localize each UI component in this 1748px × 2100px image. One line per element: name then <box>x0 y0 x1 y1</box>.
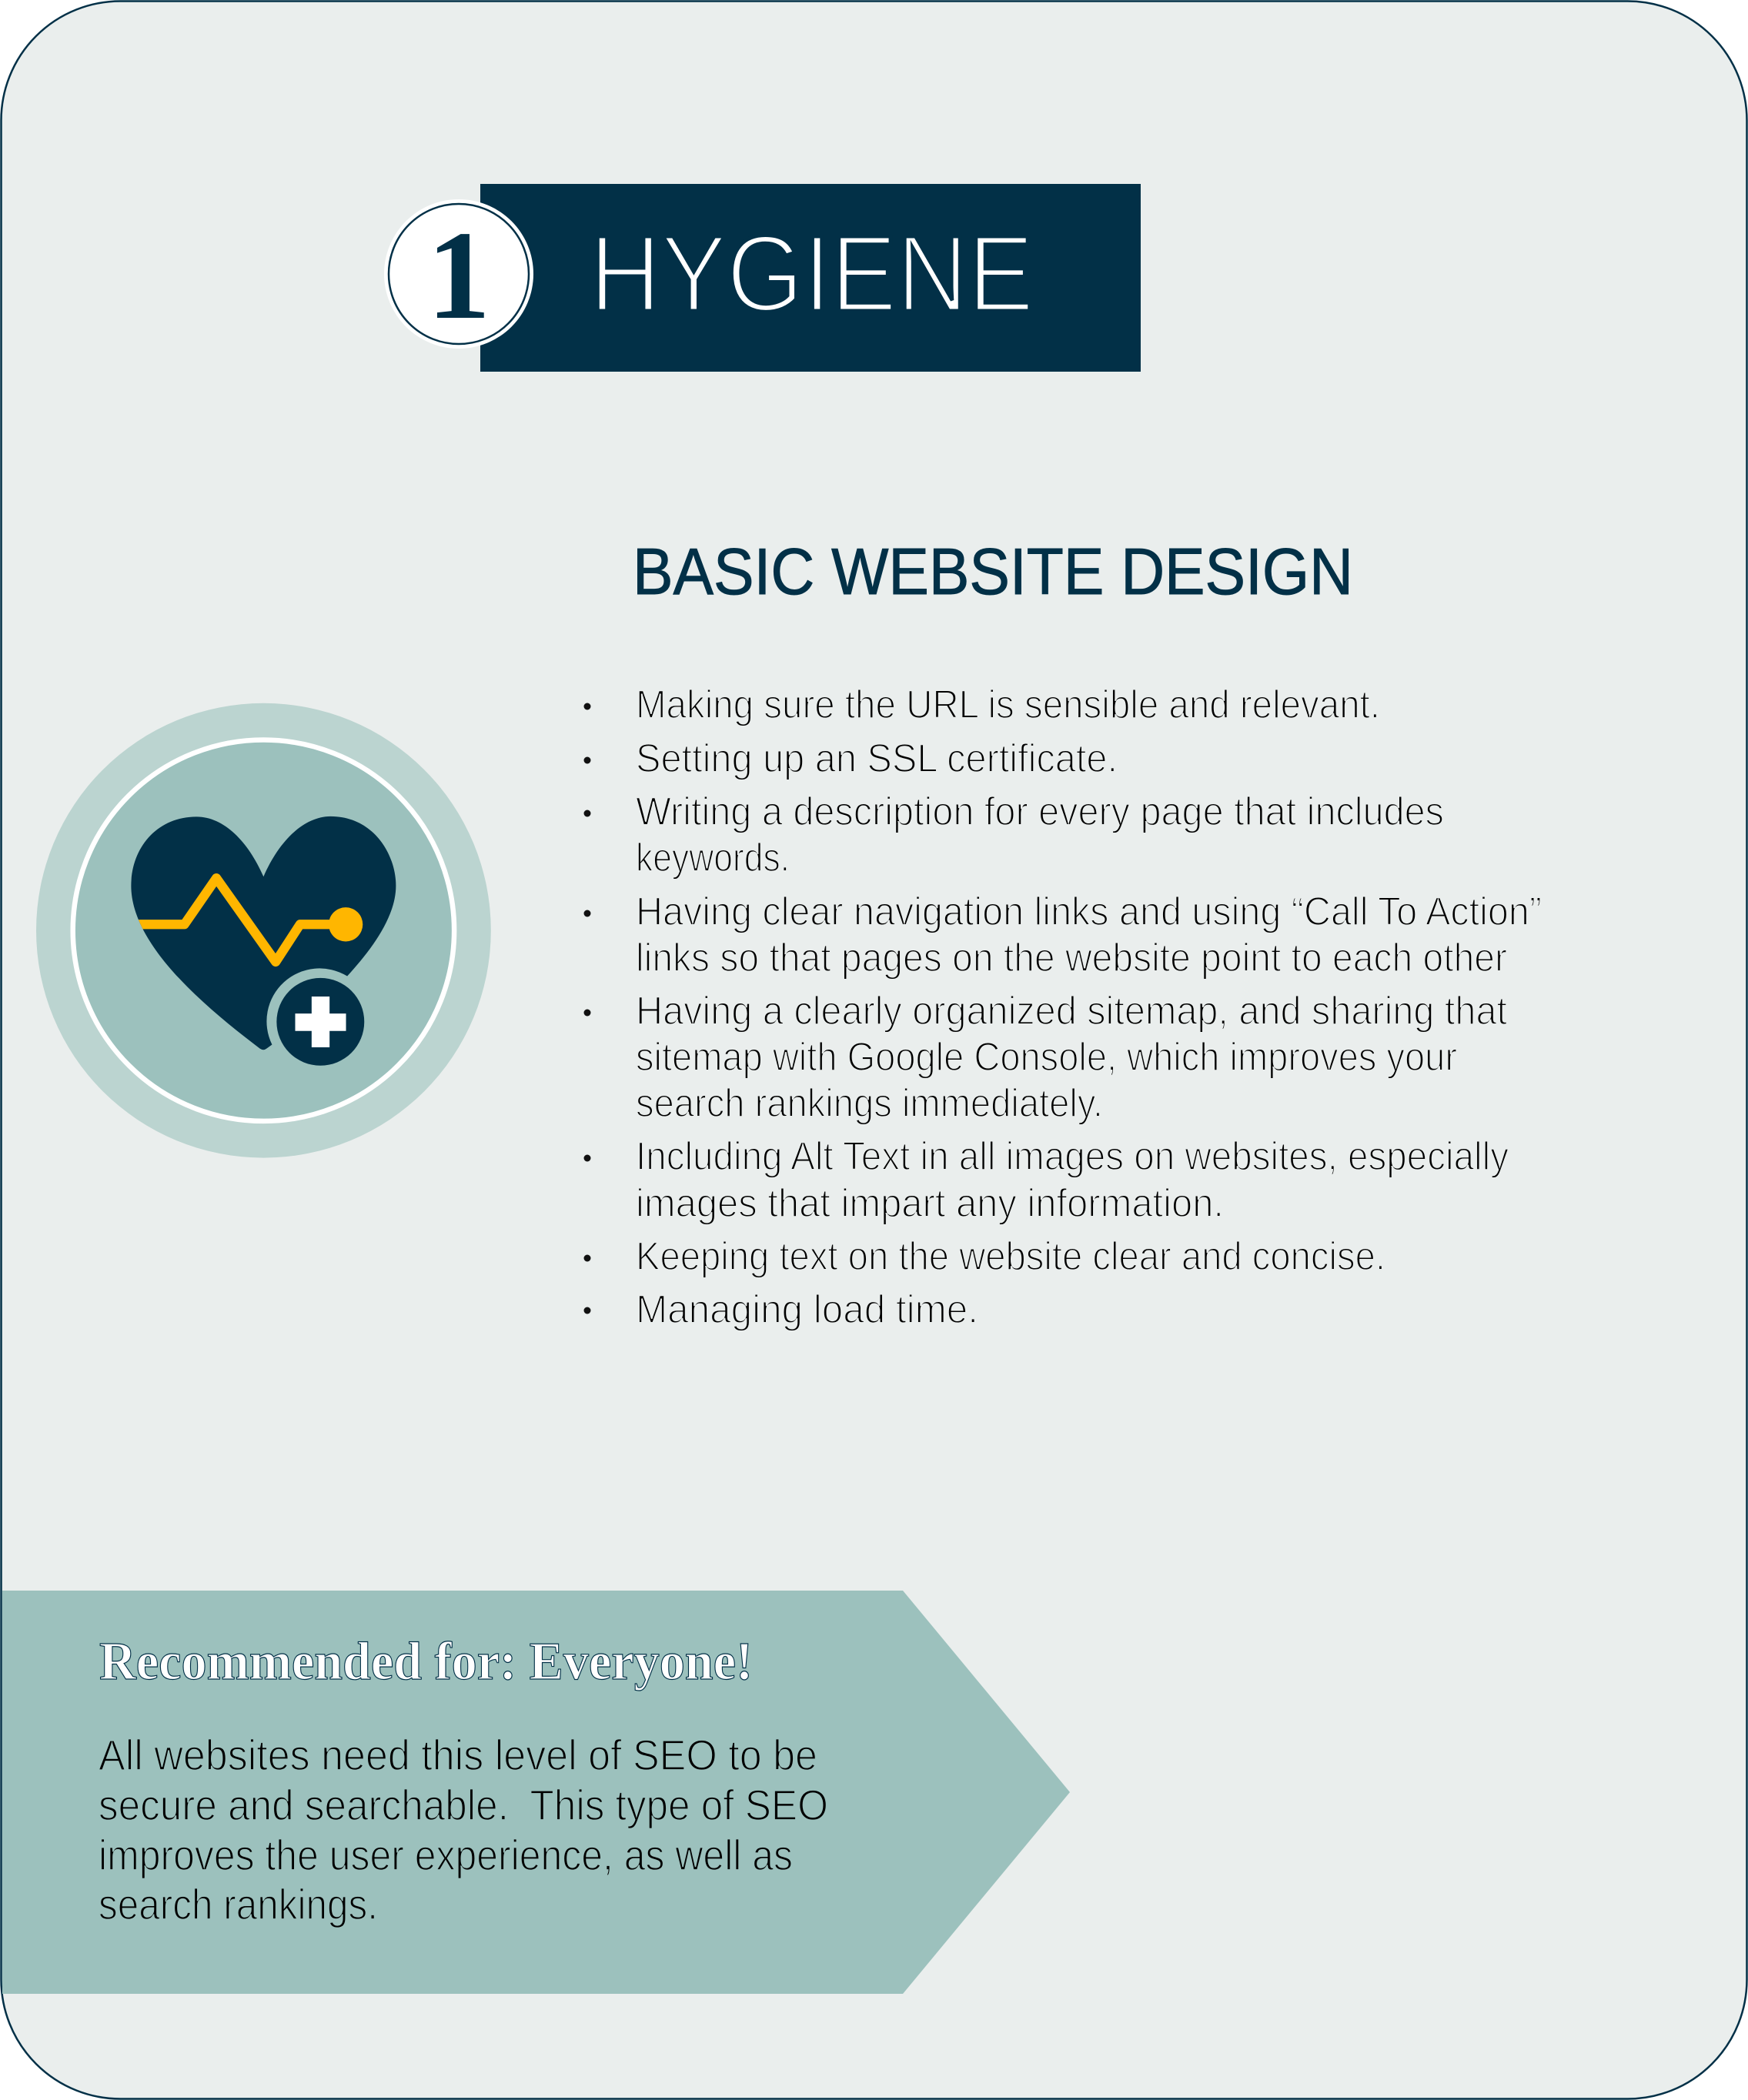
bullet: description: keywords. <box>636 836 790 880</box>
title bar <box>480 184 1141 372</box>
callout arrow: recommended for <box>2 1591 1070 1994</box>
callout heading: Recommended for: Everyone! <box>99 1632 753 1691</box>
callout text: secure and searchable. This type of SEO <box>99 1781 828 1829</box>
bullet: sitemap <box>583 989 1508 1126</box>
section header: number and title <box>384 184 1141 372</box>
callout text: improves the user experience, as well as <box>99 1831 793 1879</box>
bullet: load time: Managing load time. <box>636 1287 978 1332</box>
bullet: navigation <box>583 890 1542 980</box>
bullet: sitemap: sitemap with Google Console, which improves your <box>636 1035 1457 1080</box>
bullet: alt text: images that impart any information. <box>636 1181 1224 1226</box>
icon: heart with pulse and plus <box>36 703 491 1158</box>
callout text: All websites need this level of SEO to be <box>99 1731 817 1779</box>
bullet: description <box>583 790 1444 880</box>
callout text <box>99 1731 828 1928</box>
heading: basic website design: BASIC WEBSITE DESIGN <box>633 536 1353 609</box>
bullet: URL: Making sure the URL is sensible and relevant. <box>636 683 1380 727</box>
bullet: description: Writing a description for every page that includes <box>636 790 1444 834</box>
bullet: alt text: Including Alt Text in all images on websites, especially <box>636 1134 1509 1179</box>
number badge: 1 <box>427 205 490 346</box>
bullet: SSL: Setting up an SSL certificate. <box>636 736 1118 781</box>
title text: HYGIENE <box>590 212 1034 334</box>
bullet: sitemap: Having a clearly organized sitemap, and sharing that <box>636 989 1508 1033</box>
bullet: sitemap: search rankings immediately. <box>636 1081 1103 1126</box>
bullet: navigation: links so that pages on the website point to each other <box>636 936 1507 980</box>
number badge <box>384 199 533 349</box>
bullet: concise text: Keeping text on the website clear and concise. <box>636 1234 1385 1279</box>
bullet: alt text <box>583 1134 1509 1226</box>
bullet list <box>583 683 1542 1332</box>
callout text: search rankings. <box>99 1880 378 1928</box>
bullet: navigation: Having clear navigation links and using “Call To Action” <box>636 890 1542 934</box>
